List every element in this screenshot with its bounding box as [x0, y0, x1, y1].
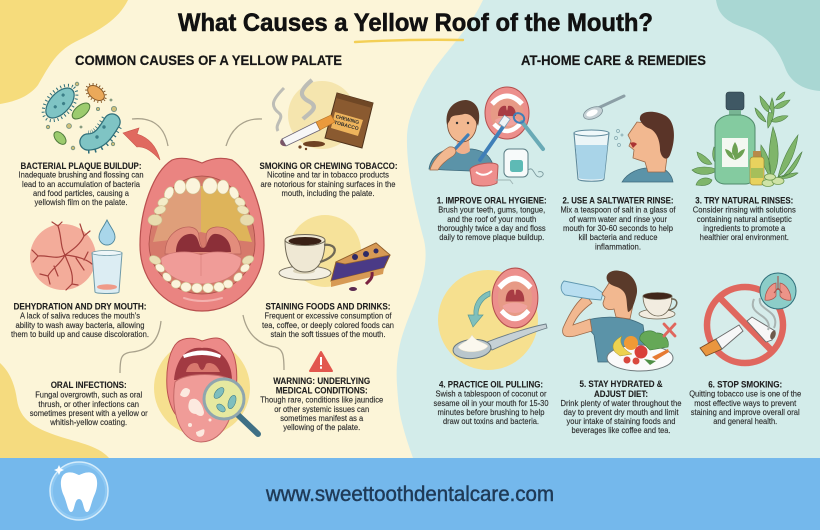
text: hydrated and diet: Drink plenty of water throughout the: [560, 398, 682, 408]
text: oral hygiene: 1. IMPROVE ORAL HYGIENE:: [437, 196, 547, 206]
icon: no smoking sign and lungs: [700, 273, 796, 363]
heading: at-home care: AT-HOME CARE & REMEDIES: [521, 53, 706, 69]
text: natural rinses: Consider rinsing with solutions: [693, 204, 796, 214]
text: hydrated and diet: 5. STAY HYDRATED &: [580, 379, 663, 389]
text: smoking or tobacco: mouth, including the palate.: [282, 188, 374, 198]
text: warning: sometimes manifest as a: [280, 413, 363, 423]
text: saltwater rinse: [560, 196, 676, 252]
text: warning: WARNING: UNDERLYING: [273, 376, 370, 386]
text: stop smoking: 6. STOP SMOKING:: [708, 380, 782, 390]
icon: drinking man with healthy plate: [561, 271, 677, 371]
icon: coffee and pie: [279, 215, 390, 291]
title: What Causes a Yellow Roof of the Mouth?: [178, 9, 653, 37]
text: saltwater rinse: inflammation.: [595, 242, 641, 252]
icon: cigarette and tobacco pouch: TOBACCO: [333, 120, 359, 132]
text: oral hygiene: and the roof of your mouth: [447, 214, 536, 224]
text: dehydration: DEHYDRATION AND DRY MOUTH:: [14, 302, 146, 312]
footer band: [0, 458, 820, 530]
text: oral infections: whitish-yellow coating.: [49, 417, 127, 427]
text: hydrated and diet: beverages like coffee and tea.: [572, 425, 670, 435]
text: saltwater rinse: kill bacteria and reduce: [578, 232, 658, 242]
icon: cigarette and tobacco pouch: [273, 80, 373, 150]
heading: common causes: COMMON CAUSES OF A YELLOW PALATE: [75, 53, 342, 69]
text: oil pulling: Swish a tablespoon of coconut or: [436, 388, 547, 398]
blob: yellow top left: [0, 0, 128, 104]
icon: bacteria: [37, 79, 117, 150]
text: saltwater rinse: 2. USE A SALTWATER RINSE:: [562, 196, 674, 206]
text: staining foods: Frequent or excessive consumption of: [264, 310, 392, 320]
text: oil pulling: minutes before brushing to help: [438, 407, 545, 417]
text: oral hygiene: daily to remove plaque buildup.: [439, 232, 544, 242]
arrow: red curved: [123, 128, 160, 160]
icon: dry cracked tissue with water: [30, 220, 122, 294]
text: dehydration: A lack of saliva reduces the mouth's: [20, 310, 140, 320]
panel: common causes: [11, 53, 398, 442]
text: bacterial plaque: [18, 161, 144, 207]
text: staining foods: [262, 302, 394, 339]
text: smoking or tobacco: SMOKING OR CHEWING TOBACCO:: [260, 161, 398, 171]
text: oral infections: thrush, or other infections can: [38, 399, 139, 409]
text: warning: Though rare, conditions like jaundice: [260, 394, 383, 404]
text: saltwater rinse: Mix a teaspoon of salt in a glass of: [560, 204, 676, 214]
text: warning: [260, 376, 383, 432]
text: oil pulling: sesame oil in your mouth for 15-30: [434, 398, 549, 408]
text: warning: MEDICAL CONDITIONS:: [276, 386, 368, 396]
text: natural rinses: 3. TRY NATURAL RINSES:: [695, 196, 793, 206]
text: warning: or other systemic issues can: [274, 404, 369, 414]
text: staining foods: tea, coffee, or deeply colored foods can: [262, 320, 394, 330]
text: dehydration: [11, 302, 149, 339]
text: oral hygiene: Brush your teeth, gums, tongue,: [438, 204, 545, 214]
text: stop smoking: and general health.: [713, 416, 777, 426]
icon: cigarette and tobacco pouch: CHEWING: [335, 114, 360, 126]
illustration: open mouth: [140, 158, 264, 311]
blob: yellow bottom left: [0, 363, 109, 458]
icon: tooth logo: [50, 462, 108, 520]
connector lines: [120, 119, 284, 373]
website url: www.sweettoothdentalcare.com: [265, 483, 554, 506]
icon: brushing man, mouth, floss: [429, 87, 543, 186]
text: oral hygiene: thoroughly twice a day and floss: [438, 223, 546, 233]
text: bacterial plaque: yellowish film on the palate.: [34, 197, 128, 207]
text: oil pulling: draw out toxins and bacteria.: [443, 416, 539, 426]
text: oil pulling: [434, 380, 549, 426]
text: bacterial plaque: and food particles, causing a: [33, 188, 129, 198]
text: natural rinses: ingredients to promote a: [703, 223, 785, 233]
icon: mouthwash and herbs: [692, 92, 802, 186]
text: smoking or tobacco: are notorious for staining surfaces in the: [260, 179, 396, 189]
text: dehydration: them to build up and cause discoloration.: [11, 329, 149, 339]
text: saltwater rinse: mouth for 30-60 seconds to help: [563, 223, 673, 233]
text: smoking or tobacco: Nicotine and tar in tobacco products: [267, 170, 389, 180]
text: hydrated and diet: your intake of staining foods and: [566, 416, 676, 426]
text: saltwater rinse: of warm water and rinse your: [569, 214, 667, 224]
text: warning: yellowing of the palate.: [283, 422, 360, 432]
icon: warning triangle: [310, 352, 332, 371]
icon: oil pulling spoon and mouth: [438, 268, 547, 370]
text: hydrated and diet: day to prevent dry mouth and limit: [564, 407, 679, 417]
illustration: infected tongue with magnifier: [154, 338, 258, 442]
text: bacterial plaque: lead to an accumulation of bacteria: [22, 179, 140, 189]
text: staining foods: stain the soft tissues of the mouth.: [270, 329, 386, 339]
text: oral infections: [30, 380, 148, 427]
text: stop smoking: most effective ways to prevent: [694, 398, 797, 408]
text: dehydration: ability to wash away bacteria, allowing: [16, 320, 145, 330]
text: hydrated and diet: [560, 379, 682, 435]
text: oil pulling: 4. PRACTICE OIL PULLING:: [439, 380, 543, 390]
background: pale blue right side: [397, 0, 820, 458]
text: oral hygiene: [437, 196, 547, 242]
text: natural rinses: [693, 196, 796, 242]
text: natural rinses: containing natural antiseptic: [697, 214, 792, 224]
text: smoking or tobacco: [260, 161, 398, 198]
text: oral infections: ORAL INFECTIONS:: [51, 380, 127, 390]
text: natural rinses: healthier oral environment.: [700, 232, 789, 242]
text: hydrated and diet: ADJUST DIET:: [594, 389, 648, 399]
text: staining foods: STAINING FOODS AND DRINKS:: [266, 302, 390, 312]
text: bacterial plaque: BACTERIAL PLAQUE BUILDUP:: [20, 161, 142, 171]
text: oral infections: Fungal overgrowth, such as oral: [35, 390, 142, 400]
text: stop smoking: Quitting tobacco use is one of the: [689, 388, 801, 398]
text: oral infections: sometimes present with a yellow or: [30, 408, 148, 418]
text: stop smoking: [689, 380, 801, 426]
panel: at-home care: [429, 53, 802, 435]
text: bacterial plaque: Inadequate brushing and flossing can: [18, 170, 144, 180]
blob: teal top right: [716, 0, 820, 91]
icon: saltwater glass and rinsing man: [574, 96, 674, 182]
text: stop smoking: staining and improve overall oral: [691, 407, 800, 417]
